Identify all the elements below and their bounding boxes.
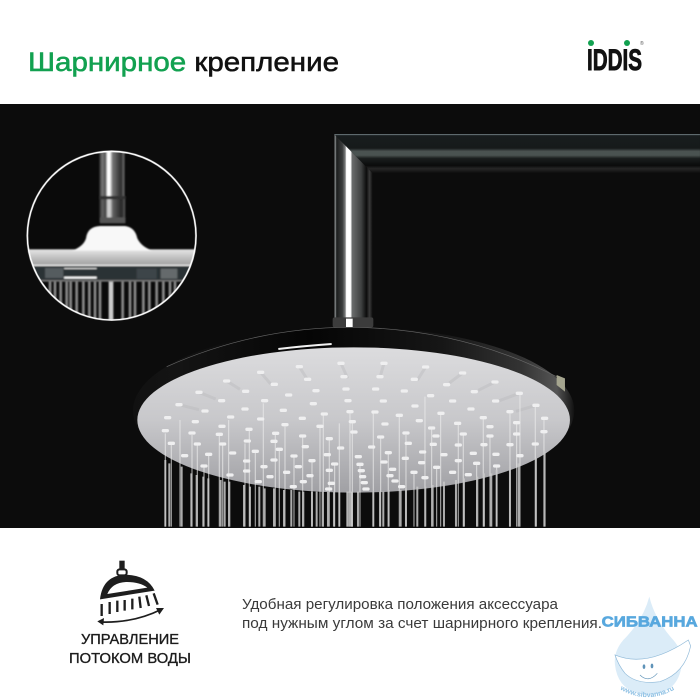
white face: [137, 347, 570, 493]
nozzles: [163, 363, 547, 489]
water streams over face: [165, 395, 544, 527]
pipe: [99, 150, 125, 197]
watermark: Sibvanna: [602, 597, 698, 698]
description text: [242, 597, 602, 632]
logo: IDDIS: ®: [640, 40, 644, 47]
description text: Удобная регулировка положения аксессуара: [242, 597, 559, 613]
icon: shower head with swivel arrow: [97, 561, 164, 625]
icon caption: УПРАВЛЕНИЕ: [81, 631, 179, 648]
title: Шарнирное крепление: [28, 47, 339, 77]
watermark: Sibvanna: СИБВАННА: [602, 615, 698, 631]
description text: под нужным углом за счет шарнирного крепления.: [242, 616, 602, 632]
shower arm pipe: [333, 134, 700, 327]
chrome rim: [133, 327, 574, 494]
photo panel: shower head on dark background: [0, 104, 700, 528]
icon caption: ПОТОКОМ ВОДЫ: [69, 650, 191, 667]
shower head: [133, 327, 574, 527]
icon caption: [69, 631, 191, 667]
white plate: [27, 249, 197, 266]
logo: IDDIS: IDDIS: [587, 44, 642, 77]
water: [50, 282, 175, 320]
inset circle: hinge close-up: [27, 150, 197, 320]
chrome band: [27, 266, 197, 280]
nozzle shadows: [179, 363, 536, 411]
watermark: Sibvanna: www.sibvanna.ru: [620, 686, 674, 698]
logo: IDDIS: [587, 40, 644, 77]
